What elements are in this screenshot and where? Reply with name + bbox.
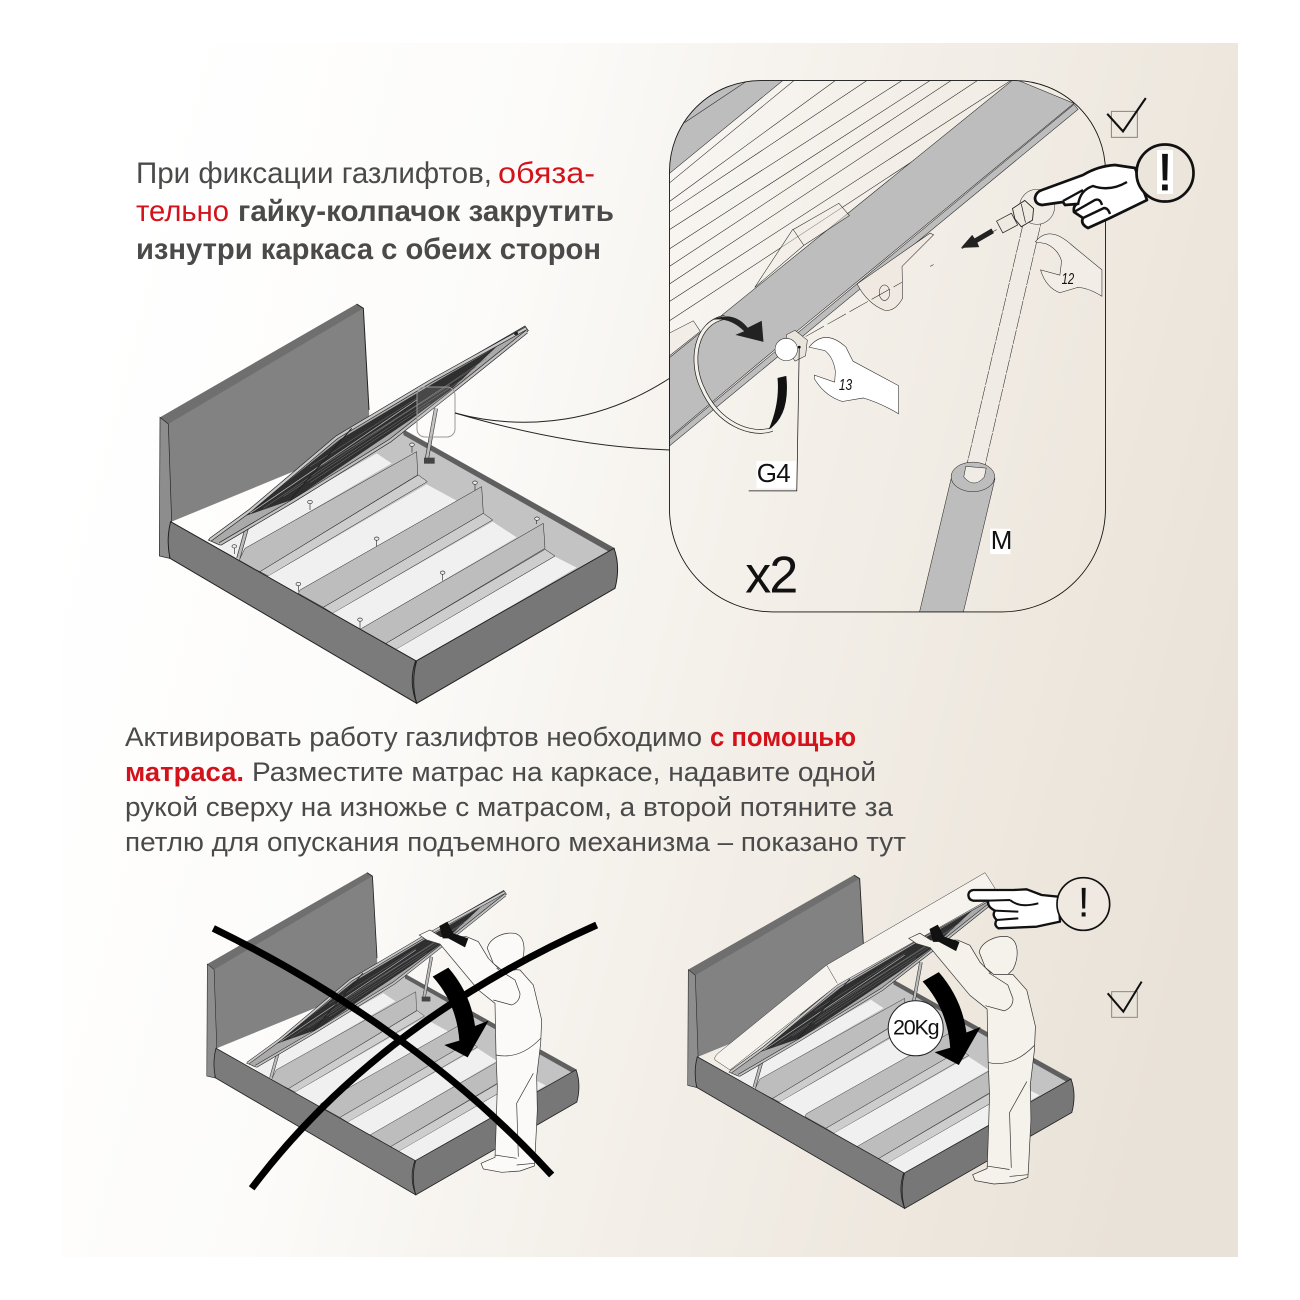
cross mark [213,925,597,1188]
illustration: wrong way, no mattress, crossed out [207,873,597,1195]
icon: pointing hand with exclamation: ! [1078,879,1089,926]
icon: pointing hand with exclamation [968,878,1110,930]
callout box around gas lift [417,387,455,437]
heading: gas lift fixing instruction: обяза- [498,157,595,190]
heading: gas lift fixing instruction: При фиксации газлифтов, [136,157,492,190]
text block: activating gas lifts with mattress: Активировать работу газлифтов необходимо [125,722,702,752]
gas cylinder [920,479,995,612]
label 13: 13 [839,377,853,394]
person lowering lid [909,925,1035,1184]
heading: gas lift fixing instruction: изнутри каркаса с обеих сторон [136,233,601,266]
checkbox [1108,982,1142,1017]
label G4: G4 [757,460,790,488]
gas lift bracket plate [857,233,934,310]
G4 leader [749,347,799,491]
illustration: bed with opened lift mechanism [159,304,618,703]
text block: activating gas lifts with mattress: Разместите матрас на каркасе, надавите одной [252,757,876,787]
heading: gas lift fixing instruction: тельно [136,195,229,228]
gray corner band [669,81,783,173]
heading: gas lift fixing instruction [136,157,614,266]
wrench 12 [1035,234,1102,296]
rounded panel outline [669,81,1105,612]
checkbox [1107,98,1146,137]
label x2: x2 [745,547,797,605]
label 12: 12 [1062,271,1075,288]
icon: pointing hand with exclamation: ! [1158,144,1172,202]
text block: activating gas lifts with mattress: матраса. [125,757,244,787]
small motion arrow [961,229,994,248]
weight badge 20Kg [888,1001,943,1056]
wrench 13 [809,337,899,414]
joint and threaded stud [1020,189,1055,224]
illustration: correct way, with mattress [688,873,1142,1208]
heading: gas lift fixing instruction: гайку-колпачок закрутить [238,195,614,228]
text block: activating gas lifts with mattress: с помощью [710,722,856,752]
axis dash line [806,230,997,337]
main gray frame rail [669,79,1074,438]
tightening loop arrows [696,317,772,431]
label M: M [991,527,1012,555]
gas lift rod [967,217,1042,468]
lid slats [669,81,1014,321]
person lowering lid [419,922,542,1172]
pins on slats [232,332,539,628]
connector curves to detail panel [455,378,670,450]
panel: gas lift detail view [669,79,1146,612]
icon: pointing hand with exclamation [1035,144,1194,228]
nut and cap [786,330,807,361]
weight badge 20Kg: 20Kg [893,1016,939,1040]
text block: activating gas lifts with mattress [125,722,906,857]
mattress raised on lid [715,873,995,1070]
text block: activating gas lifts with mattress: петлю для опускания подъемного механизма – показано тут [125,827,906,857]
bracket on lid [755,203,849,287]
text block: activating gas lifts with mattress: рукой сверху на изножье с матрасом, а второй потяните за [125,792,894,822]
